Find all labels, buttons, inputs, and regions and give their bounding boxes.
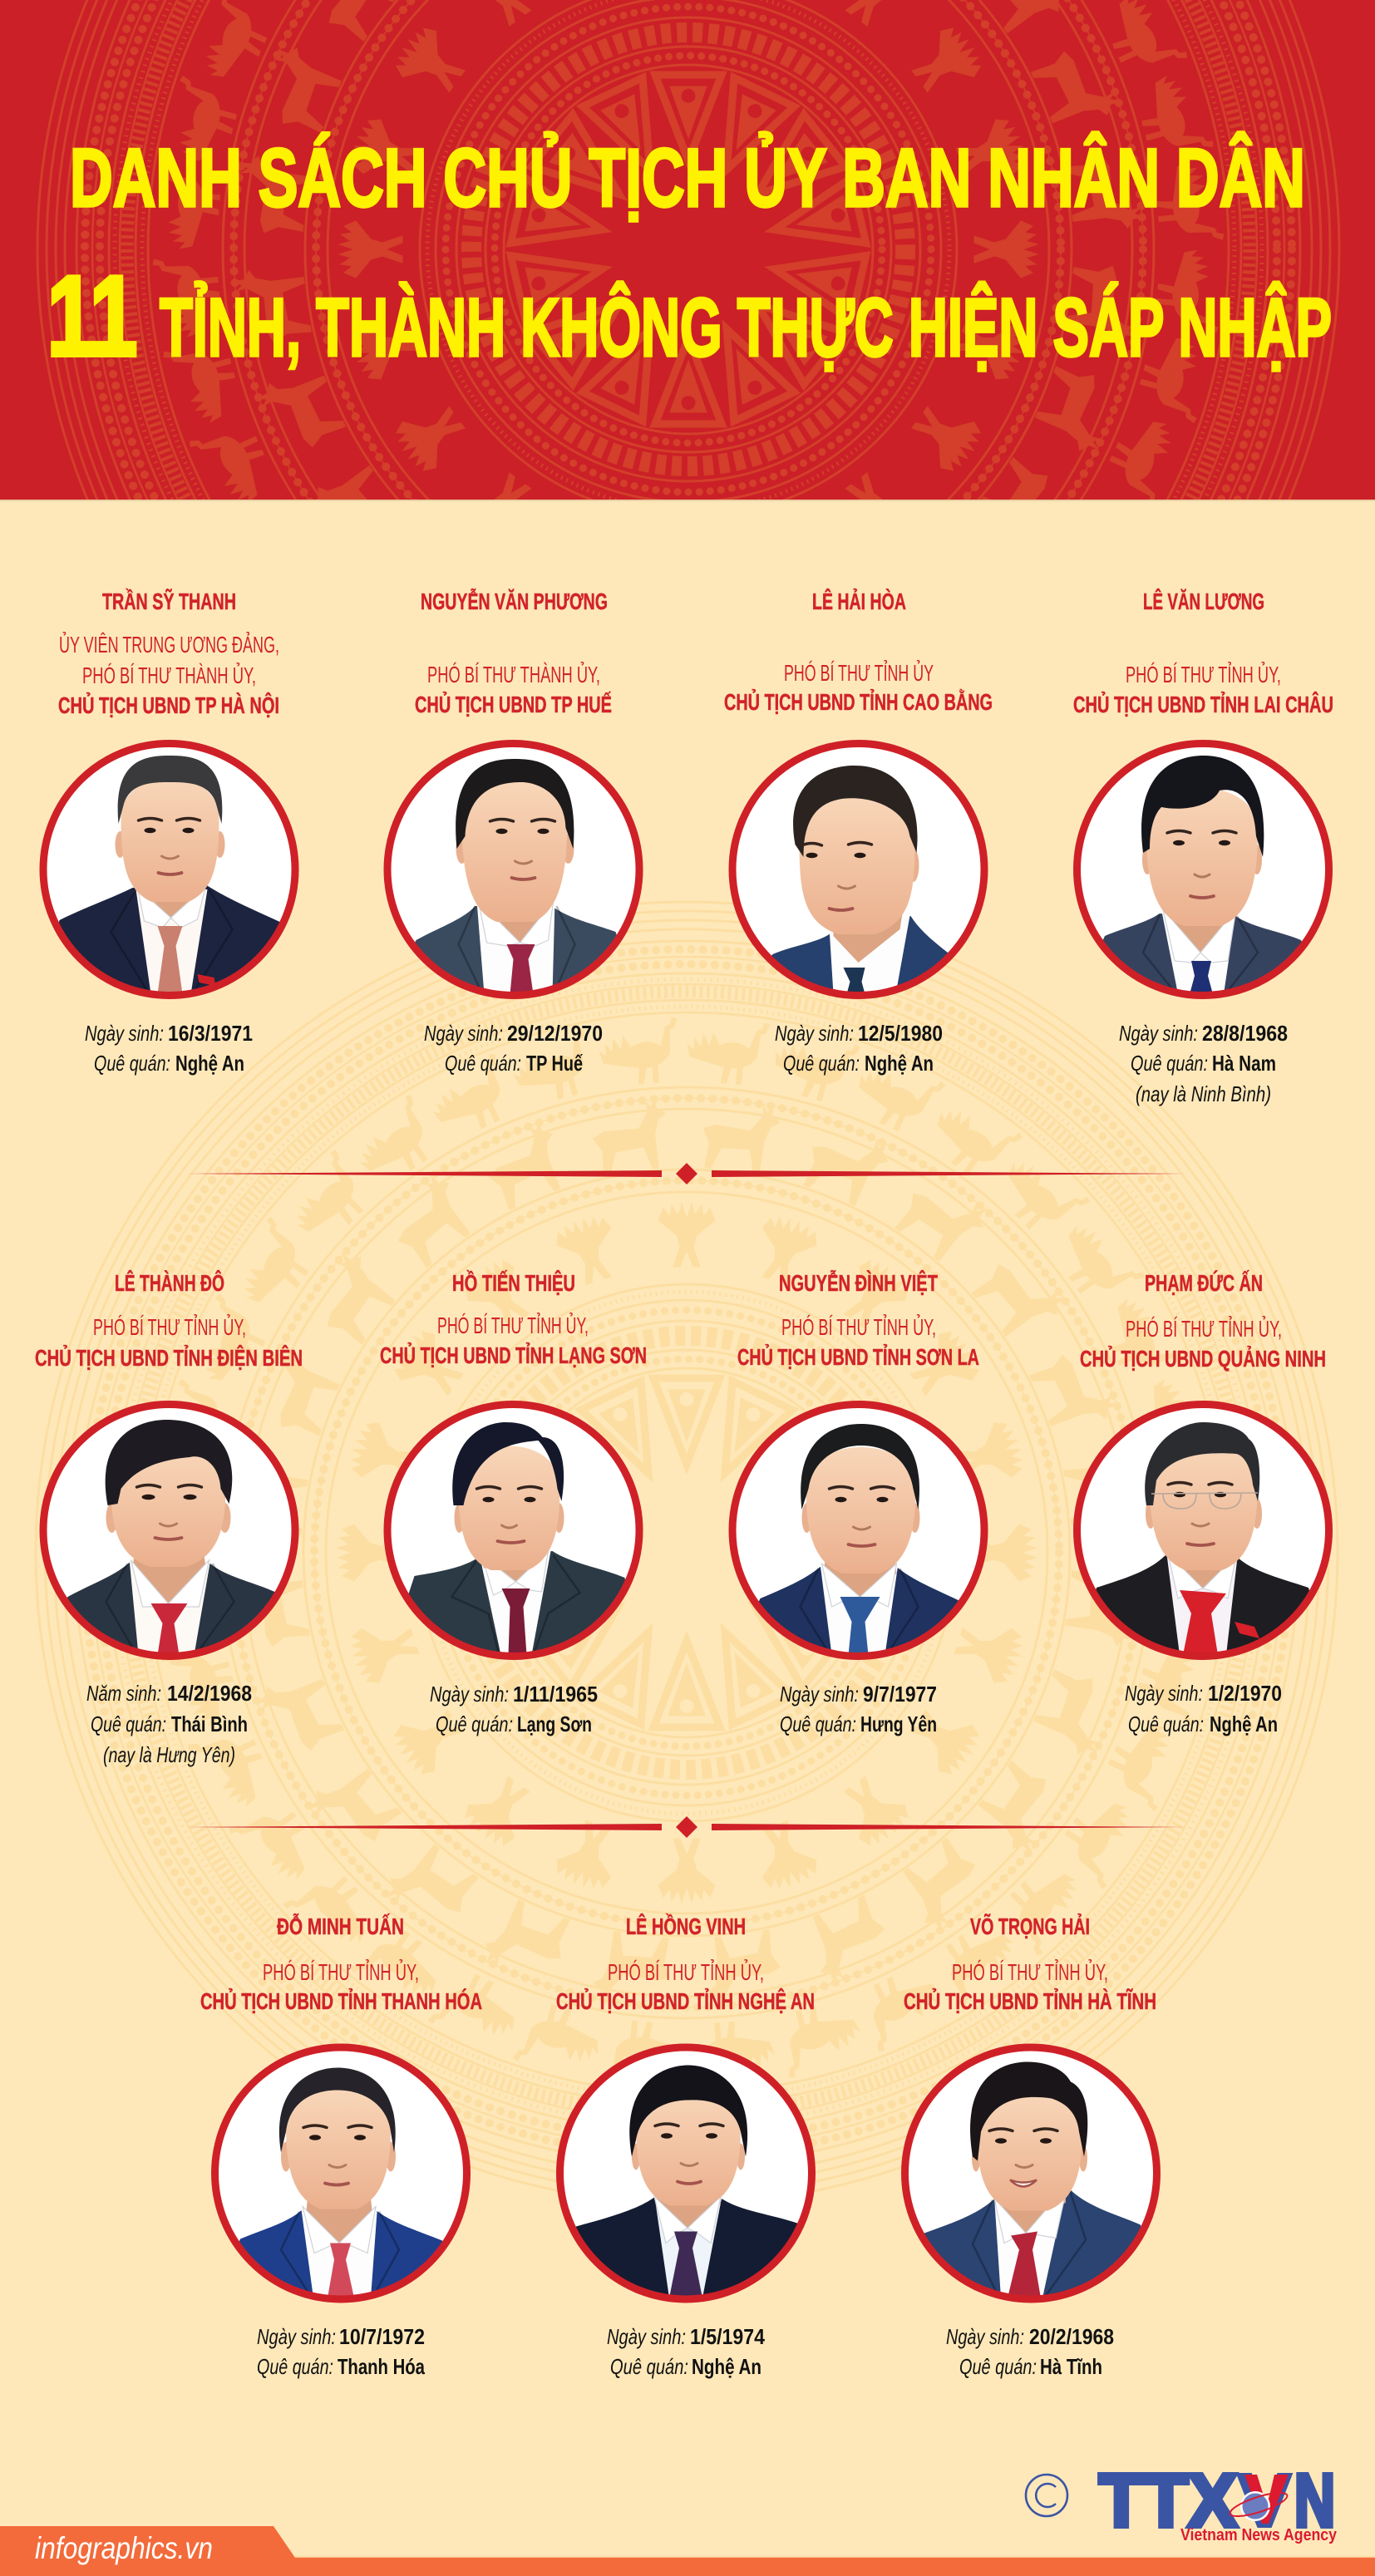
bio: Quê quán: [1128,1712,1204,1736]
position: PHÓ BÍ THƯ TỈNH ỦY, [952,1958,1108,1985]
footer band [0,2526,1375,2576]
position [200,1958,482,2014]
bio: Ngày sinh: [424,1021,503,1046]
panel: Lê Hồng Vinh [556,1914,815,2379]
position: CHỦ TỊCH UBND TỈNH THANH HÓA [200,1987,482,2014]
bio: (nay là Hưng Yên) [103,1742,235,1767]
name: VÕ TRỌNG HẢI [970,1913,1090,1939]
position [415,661,612,717]
bio: Hưng Yên [860,1712,937,1736]
position: CHỦ TỊCH UBND TỈNH LẠNG SƠN [380,1342,647,1368]
source label: infographics.vn [35,2531,213,2565]
bio: Ngày sinh: [946,2324,1024,2349]
bio: Ngày sinh: [1125,1681,1203,1706]
position [556,1958,815,2014]
portrait [43,743,295,996]
position [58,631,279,718]
icon: copyright [1026,2475,1067,2516]
bio: Nghệ An [692,2354,761,2379]
position: PHÓ BÍ THƯ TỈNH ỦY, [93,1313,246,1340]
name: NGUYỄN ĐÌNH VIỆT [779,1270,938,1296]
panel: Trần Sỹ Thanh [43,589,295,1076]
bio: TP Huế [526,1051,583,1076]
portrait [732,743,984,996]
logo: TTXVN: V [1238,2460,1291,2543]
bio [1119,1021,1288,1106]
portrait [387,743,639,996]
position: CHỦ TỊCH UBND TỈNH CAO BẰNG [724,688,993,715]
position [1073,661,1333,717]
position: CHỦ TỊCH UBND TP HÀ NỘI [58,692,279,718]
bio: 14/2/1968 [167,1681,252,1706]
background: bronze drum watermark [36,902,1338,2204]
portrait [1077,743,1328,996]
divider 1 [186,1163,1185,1185]
position [35,1313,303,1371]
bio: 28/8/1968 [1202,1021,1288,1046]
bio: 1/11/1965 [513,1682,598,1707]
portrait [43,1405,295,1656]
position: PHÓ BÍ THƯ THÀNH ỦY, [427,661,600,687]
panel: Phạm Đức Ấn [1077,1270,1328,1736]
position: CHỦ TỊCH UBND TỈNH ĐIỆN BIÊN [35,1344,303,1371]
position: PHÓ BÍ THƯ THÀNH ỦY, [82,662,256,688]
panel: Hồ Tiến Thiệu [380,1270,647,1736]
bio [257,2324,425,2379]
bio [86,1681,252,1767]
position [904,1958,1156,2014]
portrait [732,1405,984,1656]
bio: Ngày sinh: [780,1682,859,1707]
bio: Nghệ An [1210,1712,1278,1736]
name: TRẦN SỸ THANH [102,589,236,614]
name: LÊ VĂN LƯƠNG [1143,589,1264,614]
bio: Quê quán: [959,2354,1037,2379]
portrait [904,2047,1157,2299]
bio [424,1021,603,1076]
bio [430,1682,598,1736]
portrait [214,2047,467,2299]
position: PHÓ BÍ THƯ TỈNH ỦY, [608,1958,764,1985]
position [380,1312,647,1368]
bio: (nay là Ninh Bình) [1136,1081,1271,1106]
bio: Quê quán: [445,1051,521,1076]
portrait [387,1405,639,1656]
name: HỒ TIẾN THIỆU [452,1270,575,1296]
name: LÊ HỒNG VINH [626,1914,746,1939]
name: ĐỖ MINH TUẤN [277,1914,404,1939]
panel: Lê Văn Lương [1073,589,1333,1106]
bio: 16/3/1971 [168,1021,253,1046]
bio: Ngày sinh: [1119,1021,1198,1046]
bio: Thái Bình [171,1712,248,1736]
divider 2 [186,1816,1185,1838]
name: LÊ THÀNH ĐÔ [115,1269,224,1296]
bio: Năm sinh: [86,1681,161,1706]
panel: Võ Trọng Hải [904,1913,1157,2379]
position: ỦY VIÊN TRUNG ƯƠNG ĐẢNG, [59,631,279,658]
portrait [1077,1405,1328,1656]
bio: Nghệ An [865,1051,934,1076]
position: CHỦ TỊCH UBND TỈNH NGHỆ AN [556,1987,815,2014]
bio: Nghệ An [175,1051,244,1076]
position: CHỦ TỊCH UBND TỈNH HÀ TĨNH [904,1987,1156,2014]
bio: Ngày sinh: [85,1021,164,1046]
bio [775,1021,943,1076]
position: CHỦ TỊCH UBND TỈNH SƠN LA [737,1343,979,1370]
bio: 12/5/1980 [858,1021,943,1046]
name: PHẠM ĐỨC ẤN [1145,1270,1263,1296]
position [724,659,993,715]
bio: 20/2/1968 [1029,2324,1114,2349]
bio: Hà Tĩnh [1040,2354,1102,2379]
bio: Quê quán: [1131,1051,1208,1076]
bio: Ngày sinh: [775,1021,854,1046]
name: LÊ HẢI HÒA [812,588,906,614]
bio [946,2324,1114,2379]
bio: Quê quán: [610,2354,688,2379]
position: PHÓ BÍ THƯ TỈNH ỦY [784,659,934,686]
bio: Hà Nam [1212,1051,1276,1076]
bio: 29/12/1970 [507,1021,603,1046]
portrait [560,2047,811,2299]
panel: Nguyễn Đình Việt [732,1270,984,1736]
bio: Lạng Sơn [517,1712,592,1736]
position [737,1313,979,1370]
logo: TTXVN: Vietnam News Agency [1180,2526,1338,2544]
bio: 1/5/1974 [690,2324,765,2349]
bio: Quê quán: [783,1051,860,1076]
bio: 9/7/1977 [863,1682,937,1707]
bio: Quê quán: [94,1051,170,1076]
logo: TTXVN [1026,2460,1338,2544]
panel: Nguyễn Văn Phương [387,589,639,1076]
position: PHÓ BÍ THƯ TỈNH ỦY, [437,1312,589,1338]
bio: Ngày sinh: [257,2324,336,2349]
logo: TTXVN: TTX [1099,2460,1237,2543]
position: CHỦ TỊCH UBND TP HUẾ [415,691,612,717]
title [47,131,1332,379]
bio: 1/2/1970 [1208,1681,1282,1706]
bio [607,2324,765,2379]
title: 11 [47,253,137,379]
bio [780,1682,937,1736]
bio: Quê quán: [436,1712,513,1736]
bio [1125,1681,1282,1736]
bio: Quê quán: [91,1712,166,1736]
bio: 10/7/1972 [339,2324,425,2349]
logo: TTXVN: N [1294,2460,1335,2543]
panel: Đỗ Minh Tuấn [200,1914,482,2379]
bio: Ngày sinh: [607,2324,686,2349]
bio: Ngày sinh: [430,1682,509,1707]
position: PHÓ BÍ THƯ TỈNH ỦY, [781,1313,936,1340]
position: PHÓ BÍ THƯ TỈNH ỦY, [263,1958,419,1985]
position [1080,1315,1326,1372]
bio [85,1021,253,1076]
position: PHÓ BÍ THƯ TỈNH ỦY, [1126,661,1281,687]
name: NGUYỄN VĂN PHƯƠNG [421,589,608,614]
position: PHÓ BÍ THƯ TỈNH ỦY, [1126,1315,1282,1342]
panel: Lê Thành Đô [35,1269,303,1767]
bio: Quê quán: [780,1712,856,1736]
bio: Quê quán: [257,2354,333,2379]
panel: Lê Hải Hòa [724,588,993,1076]
bio: Thanh Hóa [338,2354,425,2379]
header banner [0,0,1375,501]
